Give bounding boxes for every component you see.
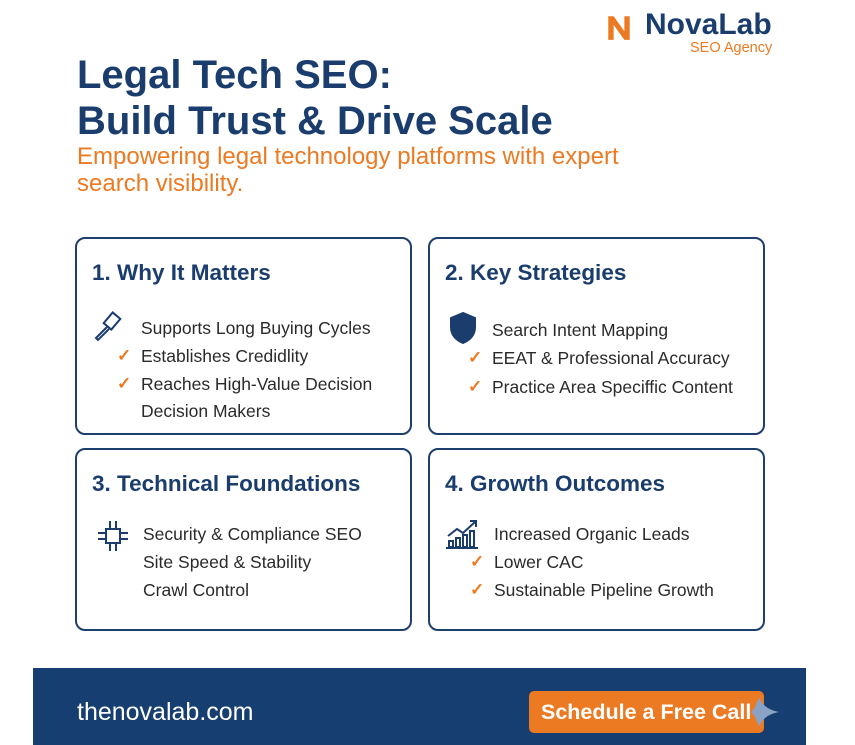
panel: key strategies [428, 237, 765, 435]
panel: technical foundations: Site Speed & Stability [143, 552, 311, 572]
panel: growth outcomes: Increased Organic Leads [494, 524, 690, 544]
icon: growth chart [446, 520, 478, 549]
title: Legal Tech SEO: [77, 53, 392, 97]
panel: why it matters: Supports Long Buying Cycles [141, 318, 371, 338]
icon: circuit [98, 521, 128, 551]
panel: why it matters: ✓ [117, 346, 131, 365]
panel: key strategies: Search Intent Mapping [492, 320, 668, 340]
panel: growth outcomes: Sustainable Pipeline Growth [494, 580, 714, 600]
website url: thenovalab.com [77, 698, 254, 726]
icon: shield [450, 312, 476, 344]
icon: sparkle [751, 697, 779, 727]
panel: why it matters: Reaches High-Value Decision [141, 374, 372, 394]
footer [33, 668, 806, 745]
title [77, 53, 553, 143]
panel: technical foundations: 3. Technical Foundations [92, 471, 360, 496]
brand name: NovaLab [645, 8, 772, 41]
panel: why it matters: ✓ [117, 374, 131, 393]
logo [608, 8, 772, 56]
subtitle: Empowering legal technology platforms with expert [77, 143, 619, 170]
title: Build Trust & Drive Scale [77, 99, 553, 143]
panel: growth outcomes: ✓ [470, 552, 484, 571]
panel: growth outcomes [428, 448, 765, 631]
icon: gavel [94, 311, 122, 342]
panel: why it matters: Establishes Credidlity [141, 346, 308, 366]
panel: technical foundations: Crawl Control [143, 580, 249, 600]
cta button: Schedule a Free Call [541, 700, 751, 724]
panel: key strategies: 2. Key Strategies [445, 260, 626, 285]
brand tagline: SEO Agency [690, 40, 772, 56]
cta button [529, 691, 764, 733]
panel: technical foundations [75, 448, 412, 631]
panel: why it matters: Decision Makers [141, 401, 270, 421]
subtitle [77, 143, 619, 197]
panel: key strategies: ✓ [468, 348, 482, 367]
panel: growth outcomes: ✓ [470, 580, 484, 599]
panel: growth outcomes: 4. Growth Outcomes [445, 471, 665, 496]
panel: why it matters: 1. Why It Matters [92, 260, 271, 285]
panel: technical foundations: Security & Compliance SEO [143, 524, 362, 544]
panel: key strategies: Practice Area Speciffic Content [492, 377, 733, 397]
subtitle: search visibility. [77, 170, 243, 197]
panel: key strategies: ✓ [468, 377, 482, 396]
panel: growth outcomes: Lower CAC [494, 552, 583, 572]
icon: logo mark [608, 16, 630, 40]
panel: key strategies: EEAT & Professional Accuracy [492, 348, 730, 368]
panel: why it matters [75, 237, 412, 435]
